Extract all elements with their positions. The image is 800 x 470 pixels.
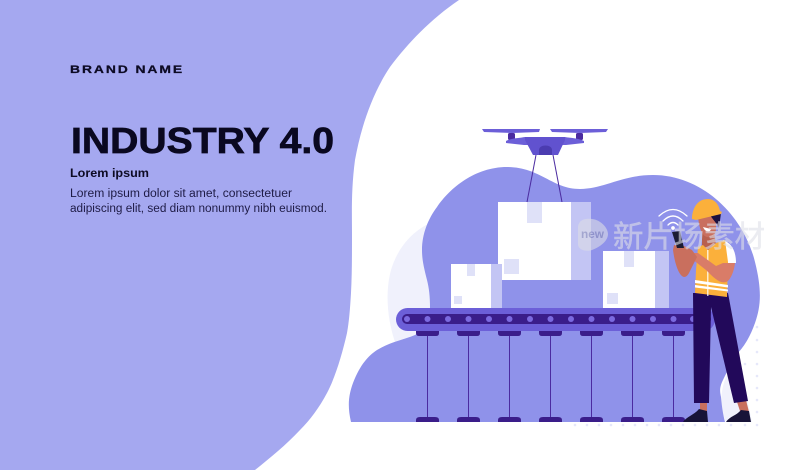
drone arms xyxy=(506,137,584,145)
conveyor legs xyxy=(416,330,685,422)
box: right xyxy=(603,251,669,308)
worker head xyxy=(698,216,716,237)
conveyor belt xyxy=(396,308,715,331)
title: INDUSTRY 4.0 xyxy=(71,120,334,161)
illustration: pale background blob right xyxy=(721,365,752,422)
body text: adipiscing elit, sed diam nonummy nibh euismod. xyxy=(70,203,327,215)
worker trousers xyxy=(693,293,748,403)
worker shirt sleeves xyxy=(685,240,736,263)
illustration: pale background blob left xyxy=(388,222,440,345)
body text: Lorem ipsum dolor sit amet, consectetuer xyxy=(70,188,292,200)
worker shoes xyxy=(683,409,751,422)
drone propellers xyxy=(482,129,608,133)
worker xyxy=(672,199,751,422)
watermark text: 新片场素材 xyxy=(613,221,765,254)
phone xyxy=(672,231,684,248)
vest reflective stripes xyxy=(695,250,728,296)
drone body xyxy=(525,137,565,155)
worker safety vest xyxy=(695,240,728,297)
brand name: BRAND NAME xyxy=(70,64,184,76)
worker hair xyxy=(710,213,721,228)
worker ankles xyxy=(700,400,749,414)
icon: wifi signal xyxy=(659,210,687,229)
box: large xyxy=(498,202,591,280)
illustration: drone xyxy=(482,129,608,202)
drone camera xyxy=(539,146,552,155)
illustration: dotted pattern xyxy=(574,326,758,426)
worker neck xyxy=(702,232,716,250)
panel: left lavender background xyxy=(0,0,459,470)
worker smile xyxy=(703,227,711,231)
watermark logo word: new xyxy=(581,227,605,241)
box: small left xyxy=(451,264,502,308)
drone motors xyxy=(508,133,583,140)
body text xyxy=(70,188,327,215)
subtitle: Lorem ipsum xyxy=(70,166,149,180)
watermark logo bubble xyxy=(578,219,608,251)
worker helmet xyxy=(692,199,722,220)
illustration: main blue blob xyxy=(349,167,760,422)
watermark xyxy=(578,219,765,254)
worker right arm xyxy=(692,253,735,282)
drone ropes xyxy=(527,155,562,202)
worker left arm xyxy=(673,245,697,277)
